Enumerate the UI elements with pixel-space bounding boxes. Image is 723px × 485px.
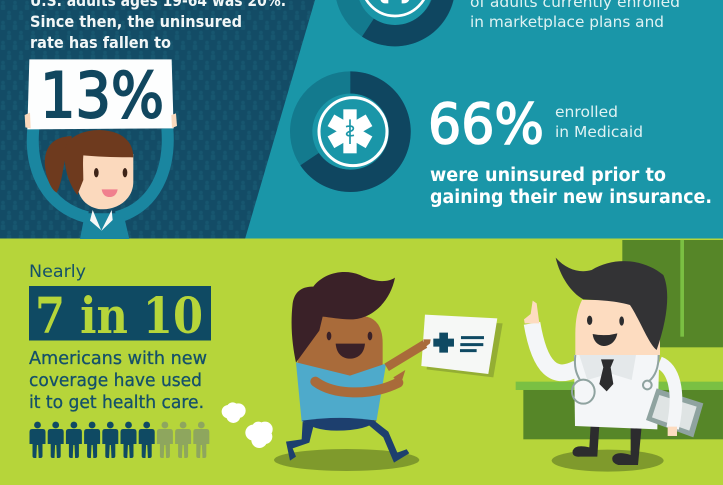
callout: 7 in 10: 7 in 10: [35, 286, 203, 345]
arms: [387, 344, 425, 367]
text: uninsured rate intro: Since then, the uninsured: [30, 12, 242, 31]
hand: [668, 427, 677, 436]
sign value: 13%: [40, 59, 164, 132]
legs: [286, 420, 409, 463]
text: Americans with new coverage: Americans with new: [29, 348, 207, 369]
right arm: [659, 363, 676, 428]
head: [77, 154, 133, 209]
illustration: doctor with clipboard: [516, 240, 723, 472]
dust clouds: [222, 402, 273, 448]
text: uninsured rate intro: [30, 0, 286, 52]
text: Americans with new coverage: coverage have used: [29, 370, 202, 391]
head: [297, 316, 383, 376]
face: [587, 316, 592, 325]
head: [575, 300, 660, 355]
text: Americans with new coverage: [29, 348, 207, 413]
counter: [516, 382, 723, 390]
text: uninsured rate intro: rate has fallen to: [30, 33, 171, 52]
eyes and mouth: [94, 168, 99, 177]
shirt: [296, 363, 386, 422]
tie: [599, 359, 614, 391]
icon: star of life: [328, 109, 372, 153]
sign: [27, 59, 174, 129]
hair: [292, 272, 395, 363]
arms: [33, 128, 168, 217]
panel: health care use green background: [0, 238, 723, 485]
stat: 66% enrolled in Medicaid: 66%: [428, 92, 544, 156]
torso: [80, 213, 129, 239]
text: previously uninsured: gaining their new insurance.: [430, 187, 712, 208]
text: Americans with new coverage: it to get health care.: [29, 392, 204, 413]
hips: [302, 418, 377, 431]
clipboard: [646, 388, 703, 437]
icon: vehicle: [380, 0, 410, 3]
donut chart: Medicaid enrollment 66%: [290, 71, 411, 192]
ground shadow: [274, 449, 419, 471]
text: previously uninsured: were uninsured prior to: [430, 165, 666, 186]
panel: uninsured rate background: [0, 0, 723, 239]
ponytail: [45, 136, 72, 193]
stethoscope: [572, 355, 659, 404]
donut chart: marketplace enrollment: [335, 0, 455, 46]
stat: 66% enrolled in Medicaid: in Medicaid: [555, 123, 643, 141]
raised arm: [532, 323, 577, 373]
hands: [25, 113, 31, 128]
illustration: running man with paper: [222, 272, 503, 471]
text: marketplace enrollment: in marketplace plans and: [470, 13, 664, 31]
paper: [427, 320, 503, 377]
hair: [65, 130, 133, 195]
text: previously uninsured: [430, 165, 712, 208]
face: [327, 332, 331, 340]
legs and shoes: [573, 425, 642, 465]
ground shadow: [552, 450, 664, 472]
coat: [574, 355, 659, 429]
hair: [556, 258, 667, 350]
stat: 66% enrolled in Medicaid: enrolled: [555, 103, 618, 121]
collar: [90, 210, 113, 231]
panel: enrollment teal background: [245, 0, 723, 239]
stat: 66% enrolled in Medicaid: [428, 92, 643, 156]
text: Nearly: Nearly: [29, 262, 86, 281]
text: marketplace enrollment: [470, 0, 680, 31]
pictogram: 7 of 10 people: [30, 422, 209, 458]
illustration: woman holding sign: [25, 59, 177, 239]
clinic wall: [622, 240, 723, 347]
